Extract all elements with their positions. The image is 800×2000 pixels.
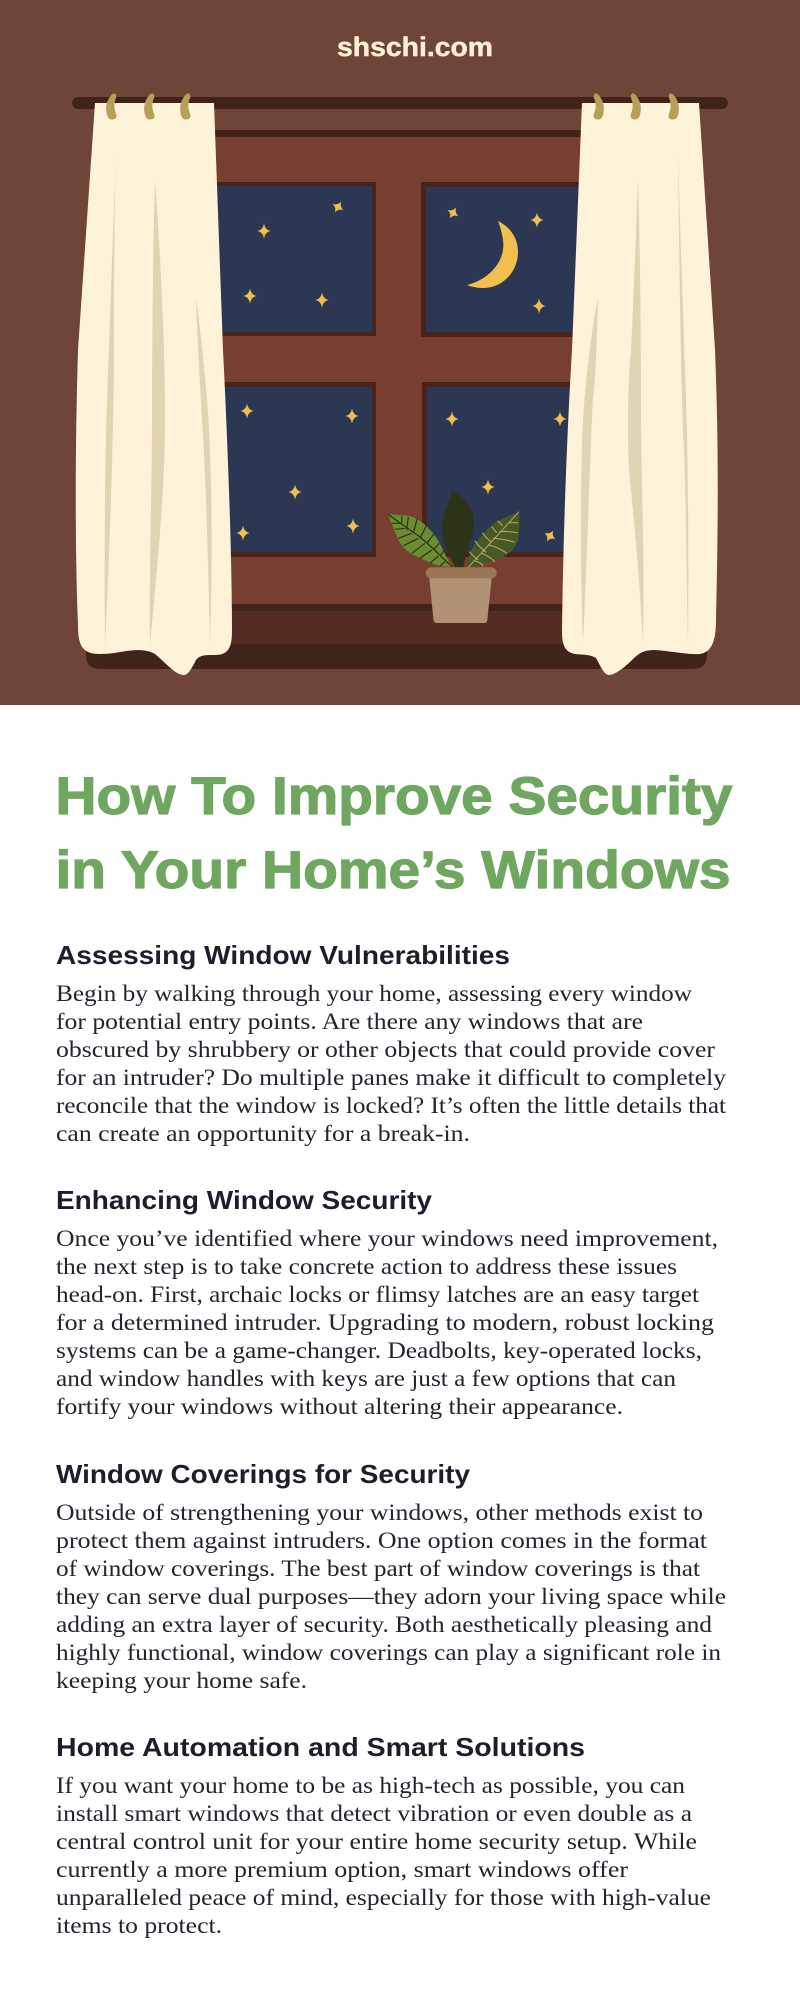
body text: Once you’ve identified where your windows need improvement,: [56, 1226, 718, 1251]
body text: install smart windows that detect vibration or even double as a: [56, 1801, 692, 1826]
window frame: [200, 130, 590, 604]
body text: [56, 1226, 718, 1419]
body text: can create an opportunity for a break-in.: [56, 1121, 470, 1146]
body text: keeping your home safe.: [56, 1668, 307, 1693]
right leaf: [466, 512, 519, 567]
body text: unparalleled peace of mind, especially for those with high-value: [56, 1885, 711, 1910]
curtain rod: [72, 97, 728, 109]
icon: potted plant: [388, 489, 519, 623]
heading: Enhancing Window Security: [56, 1185, 433, 1215]
section: window coverings for security: [56, 1459, 726, 1693]
window sill: [86, 604, 707, 669]
body text: and window handles with keys are just a few options that can: [56, 1366, 677, 1391]
title: in Your Home’s Windows: [56, 841, 730, 900]
body text: for an intruder? Do multiple panes make it difficult to completely: [56, 1065, 727, 1090]
body text: If you want your home to be as high-tech as possible, you can: [56, 1773, 686, 1798]
body text: fortify your windows without altering their appearance.: [56, 1394, 623, 1419]
pot rim: [426, 567, 497, 578]
window pane: bottom left: [190, 382, 376, 557]
body text: systems can be a game-changer. Deadbolts, key-operated locks,: [56, 1338, 702, 1363]
body text: obscured by shrubbery or other objects that could provide cover: [56, 1037, 715, 1062]
body text: [56, 1500, 726, 1693]
body text: the next step is to take concrete action to address these issues: [56, 1254, 677, 1279]
left curtain rings: [106, 93, 191, 120]
section: assessing window vulnerabilities: [56, 940, 727, 1146]
window pane: top right with moon: [421, 182, 591, 337]
heading: Home Automation and Smart Solutions: [56, 1732, 585, 1762]
icon: crescent moon: [467, 221, 518, 288]
right curtain: [562, 103, 718, 675]
panel: window illustration header: [0, 0, 800, 705]
body text: [56, 1773, 711, 1938]
body text: for a determined intruder. Upgrading to modern, robust locking: [56, 1310, 715, 1335]
body text: of window coverings. The best part of window coverings is that: [56, 1556, 701, 1581]
left leaf: [388, 514, 452, 567]
body text: reconcile that the window is locked? It’s often the little details that: [56, 1093, 727, 1118]
body text: Outside of strengthening your windows, other methods exist to: [56, 1500, 703, 1525]
body text: protect them against intruders. One option comes in the format: [56, 1528, 708, 1553]
heading: Window Coverings for Security: [56, 1459, 471, 1489]
body text: central control unit for your entire home security setup. While: [56, 1829, 697, 1854]
section: home automation and smart solutions: [56, 1732, 711, 1938]
title: How To Improve Security: [56, 767, 733, 826]
body text: head-on. First, archaic locks or flimsy latches are an easy target: [56, 1282, 700, 1307]
title: [56, 767, 733, 900]
section: enhancing window security: [56, 1185, 718, 1419]
right curtain rings: [593, 93, 679, 120]
body text: they can serve dual purposes—they adorn your living space while: [56, 1584, 726, 1609]
brand name: shschi.com: [337, 32, 493, 62]
body text: currently a more premium option, smart windows offer: [56, 1857, 628, 1882]
pot body: [429, 578, 492, 623]
window pane: bottom right: [422, 382, 592, 557]
centre leaf: [442, 489, 474, 567]
body text: adding an extra layer of security. Both aesthetically pleasing and: [56, 1612, 713, 1637]
body text: for potential entry points. Are there any windows that are: [56, 1009, 643, 1034]
body text: [56, 981, 727, 1146]
body text: Begin by walking through your home, assessing every window: [56, 981, 692, 1006]
body text: highly functional, window coverings can play a significant role in: [56, 1640, 722, 1665]
left curtain: [76, 103, 232, 675]
window pane: top left: [190, 182, 376, 336]
heading: Assessing Window Vulnerabilities: [56, 940, 510, 970]
body text: items to protect.: [56, 1913, 222, 1938]
